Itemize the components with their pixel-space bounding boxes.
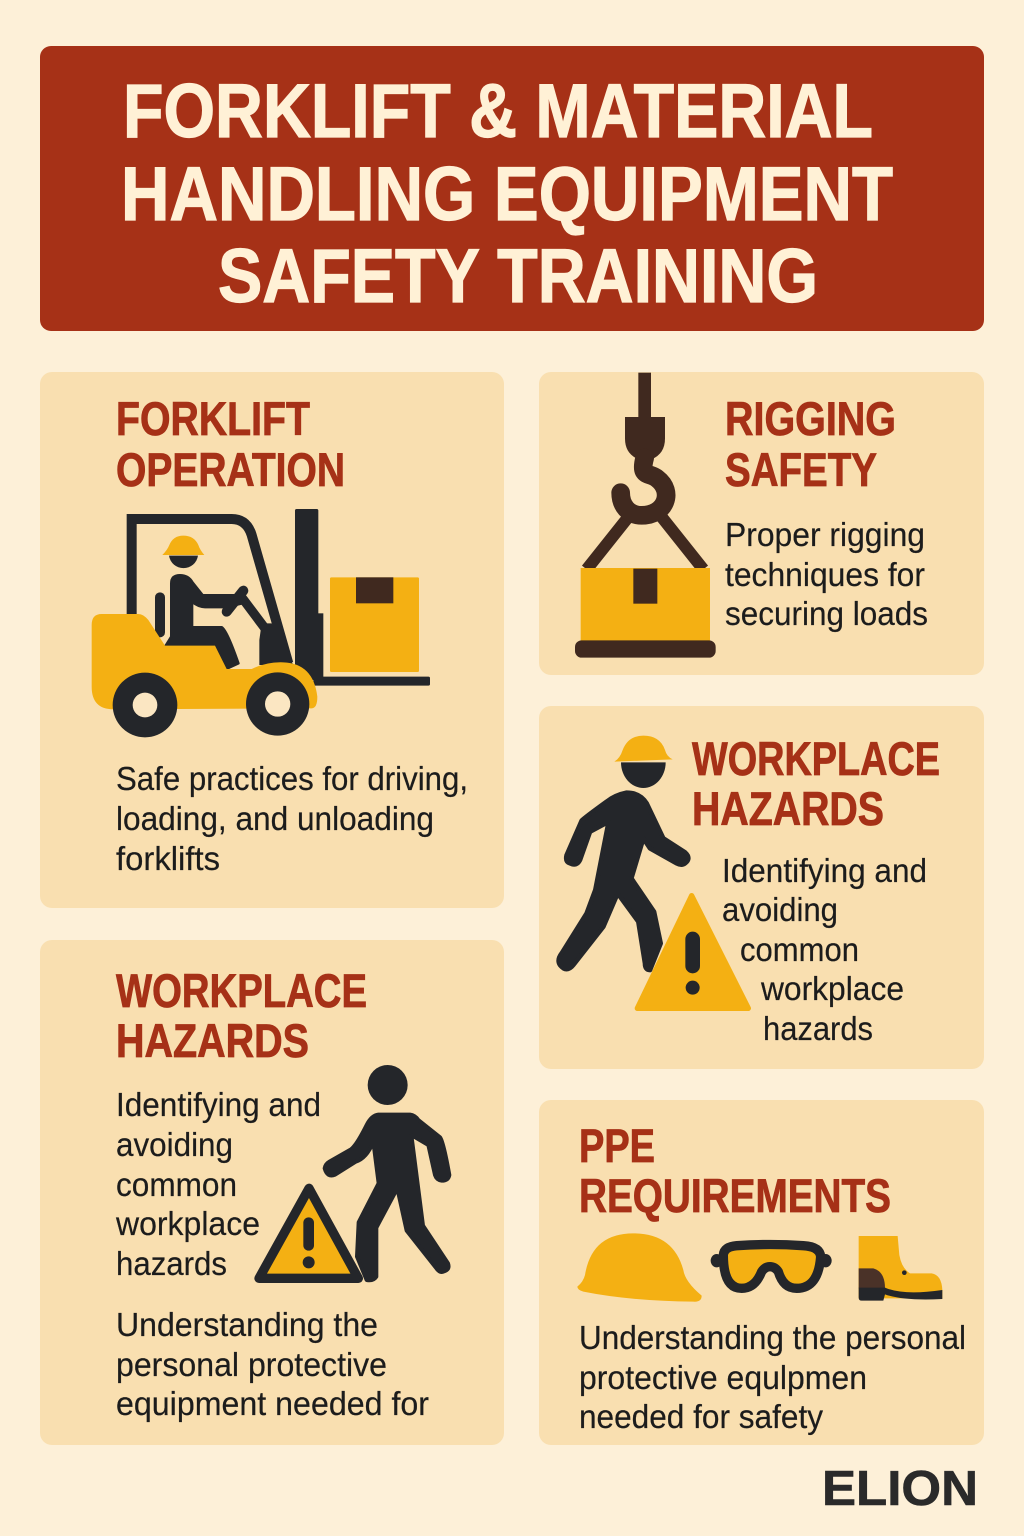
- heading: workplace hazards: HAZARDS: [116, 1014, 309, 1067]
- heading: workplace hazards: WORKPLACE: [692, 732, 940, 785]
- title banner: HANDLING EQUIPMENT: [121, 152, 893, 237]
- text: rigging description: techniques for: [725, 557, 925, 594]
- icon: crane hook lifting a box: [575, 373, 716, 658]
- text: hazards description: workplace: [115, 1206, 260, 1243]
- heading: forklift operation: FORKLIFT: [116, 392, 310, 445]
- text: protective equipment description: equipment needed for: [116, 1386, 429, 1423]
- text: ppe description: [579, 1320, 966, 1436]
- title banner: FORKLIFT & MATERIAL: [123, 69, 873, 154]
- heading: workplace hazards: [116, 964, 367, 1067]
- text: ppe description: protective equlpmen: [579, 1360, 867, 1397]
- heading: ppe requirements: PPE: [579, 1119, 655, 1172]
- text: hazards description: Identifying and: [116, 1087, 321, 1124]
- heading: workplace hazards: HAZARDS: [692, 782, 884, 835]
- text: rigging description: securing loads: [725, 596, 928, 633]
- text: hazards description: [722, 853, 927, 1048]
- panel: ppe requirements: [539, 1100, 984, 1445]
- icon: safety goggles: [711, 1244, 832, 1288]
- text: ppe description: needed for safety: [579, 1399, 823, 1436]
- heading: forklift operation: [116, 392, 345, 496]
- text: protective equipment description: Understanding the: [116, 1307, 378, 1344]
- icon: safety boot: [859, 1236, 942, 1301]
- heading: rigging safety: [725, 392, 896, 496]
- title banner: SAFETY TRAINING: [218, 234, 818, 319]
- heading: rigging safety: SAFETY: [725, 443, 877, 496]
- text: hazards description: workplace: [760, 971, 904, 1008]
- heading: ppe requirements: REQUIREMENTS: [579, 1169, 891, 1222]
- icon: forklift with driver and box: [92, 509, 430, 737]
- text: ppe description: Understanding the personal: [579, 1320, 966, 1357]
- icons: hard hat, goggles, boot: [577, 1233, 942, 1302]
- text: rigging description: [725, 517, 928, 633]
- title banner: [40, 46, 984, 331]
- text: forklift description: Safe practices for driving,: [116, 761, 468, 798]
- panel: forklift operation: [40, 372, 504, 908]
- text: hazards description: avoiding: [722, 892, 838, 929]
- heading: workplace hazards: [692, 732, 940, 835]
- text: hazards description: avoiding: [116, 1127, 233, 1164]
- text: protective equipment description: personal protective: [116, 1347, 387, 1384]
- text: hazards description: common: [740, 932, 859, 969]
- text: hazards description: [115, 1087, 321, 1283]
- icon: walking worker with hard hat and warning triangle: [559, 736, 748, 1008]
- text: hazards description: Identifying and: [722, 853, 927, 890]
- text: hazards description: common: [116, 1167, 237, 1204]
- panel: workplace hazards left: [40, 940, 504, 1445]
- text: forklift description: [116, 761, 468, 878]
- panel: rigging safety: [539, 372, 984, 675]
- text: forklift description: forklifts: [116, 841, 220, 878]
- brand: ELION: ELION: [822, 1462, 978, 1516]
- text: rigging description: Proper rigging: [725, 517, 925, 554]
- text: hazards description: hazards: [763, 1011, 873, 1048]
- icon: walking figure with warning triangle: [259, 1065, 449, 1280]
- heading: forklift operation: OPERATION: [116, 443, 345, 496]
- panel: workplace hazards right: [539, 706, 984, 1069]
- heading: rigging safety: RIGGING: [725, 392, 896, 445]
- heading: ppe requirements: [579, 1119, 891, 1222]
- text: hazards description: hazards: [116, 1246, 227, 1283]
- heading: workplace hazards: WORKPLACE: [116, 964, 367, 1017]
- text: protective equipment description: [116, 1307, 429, 1423]
- text: forklift description: loading, and unloading: [116, 801, 434, 838]
- icon: hard hat: [577, 1233, 702, 1302]
